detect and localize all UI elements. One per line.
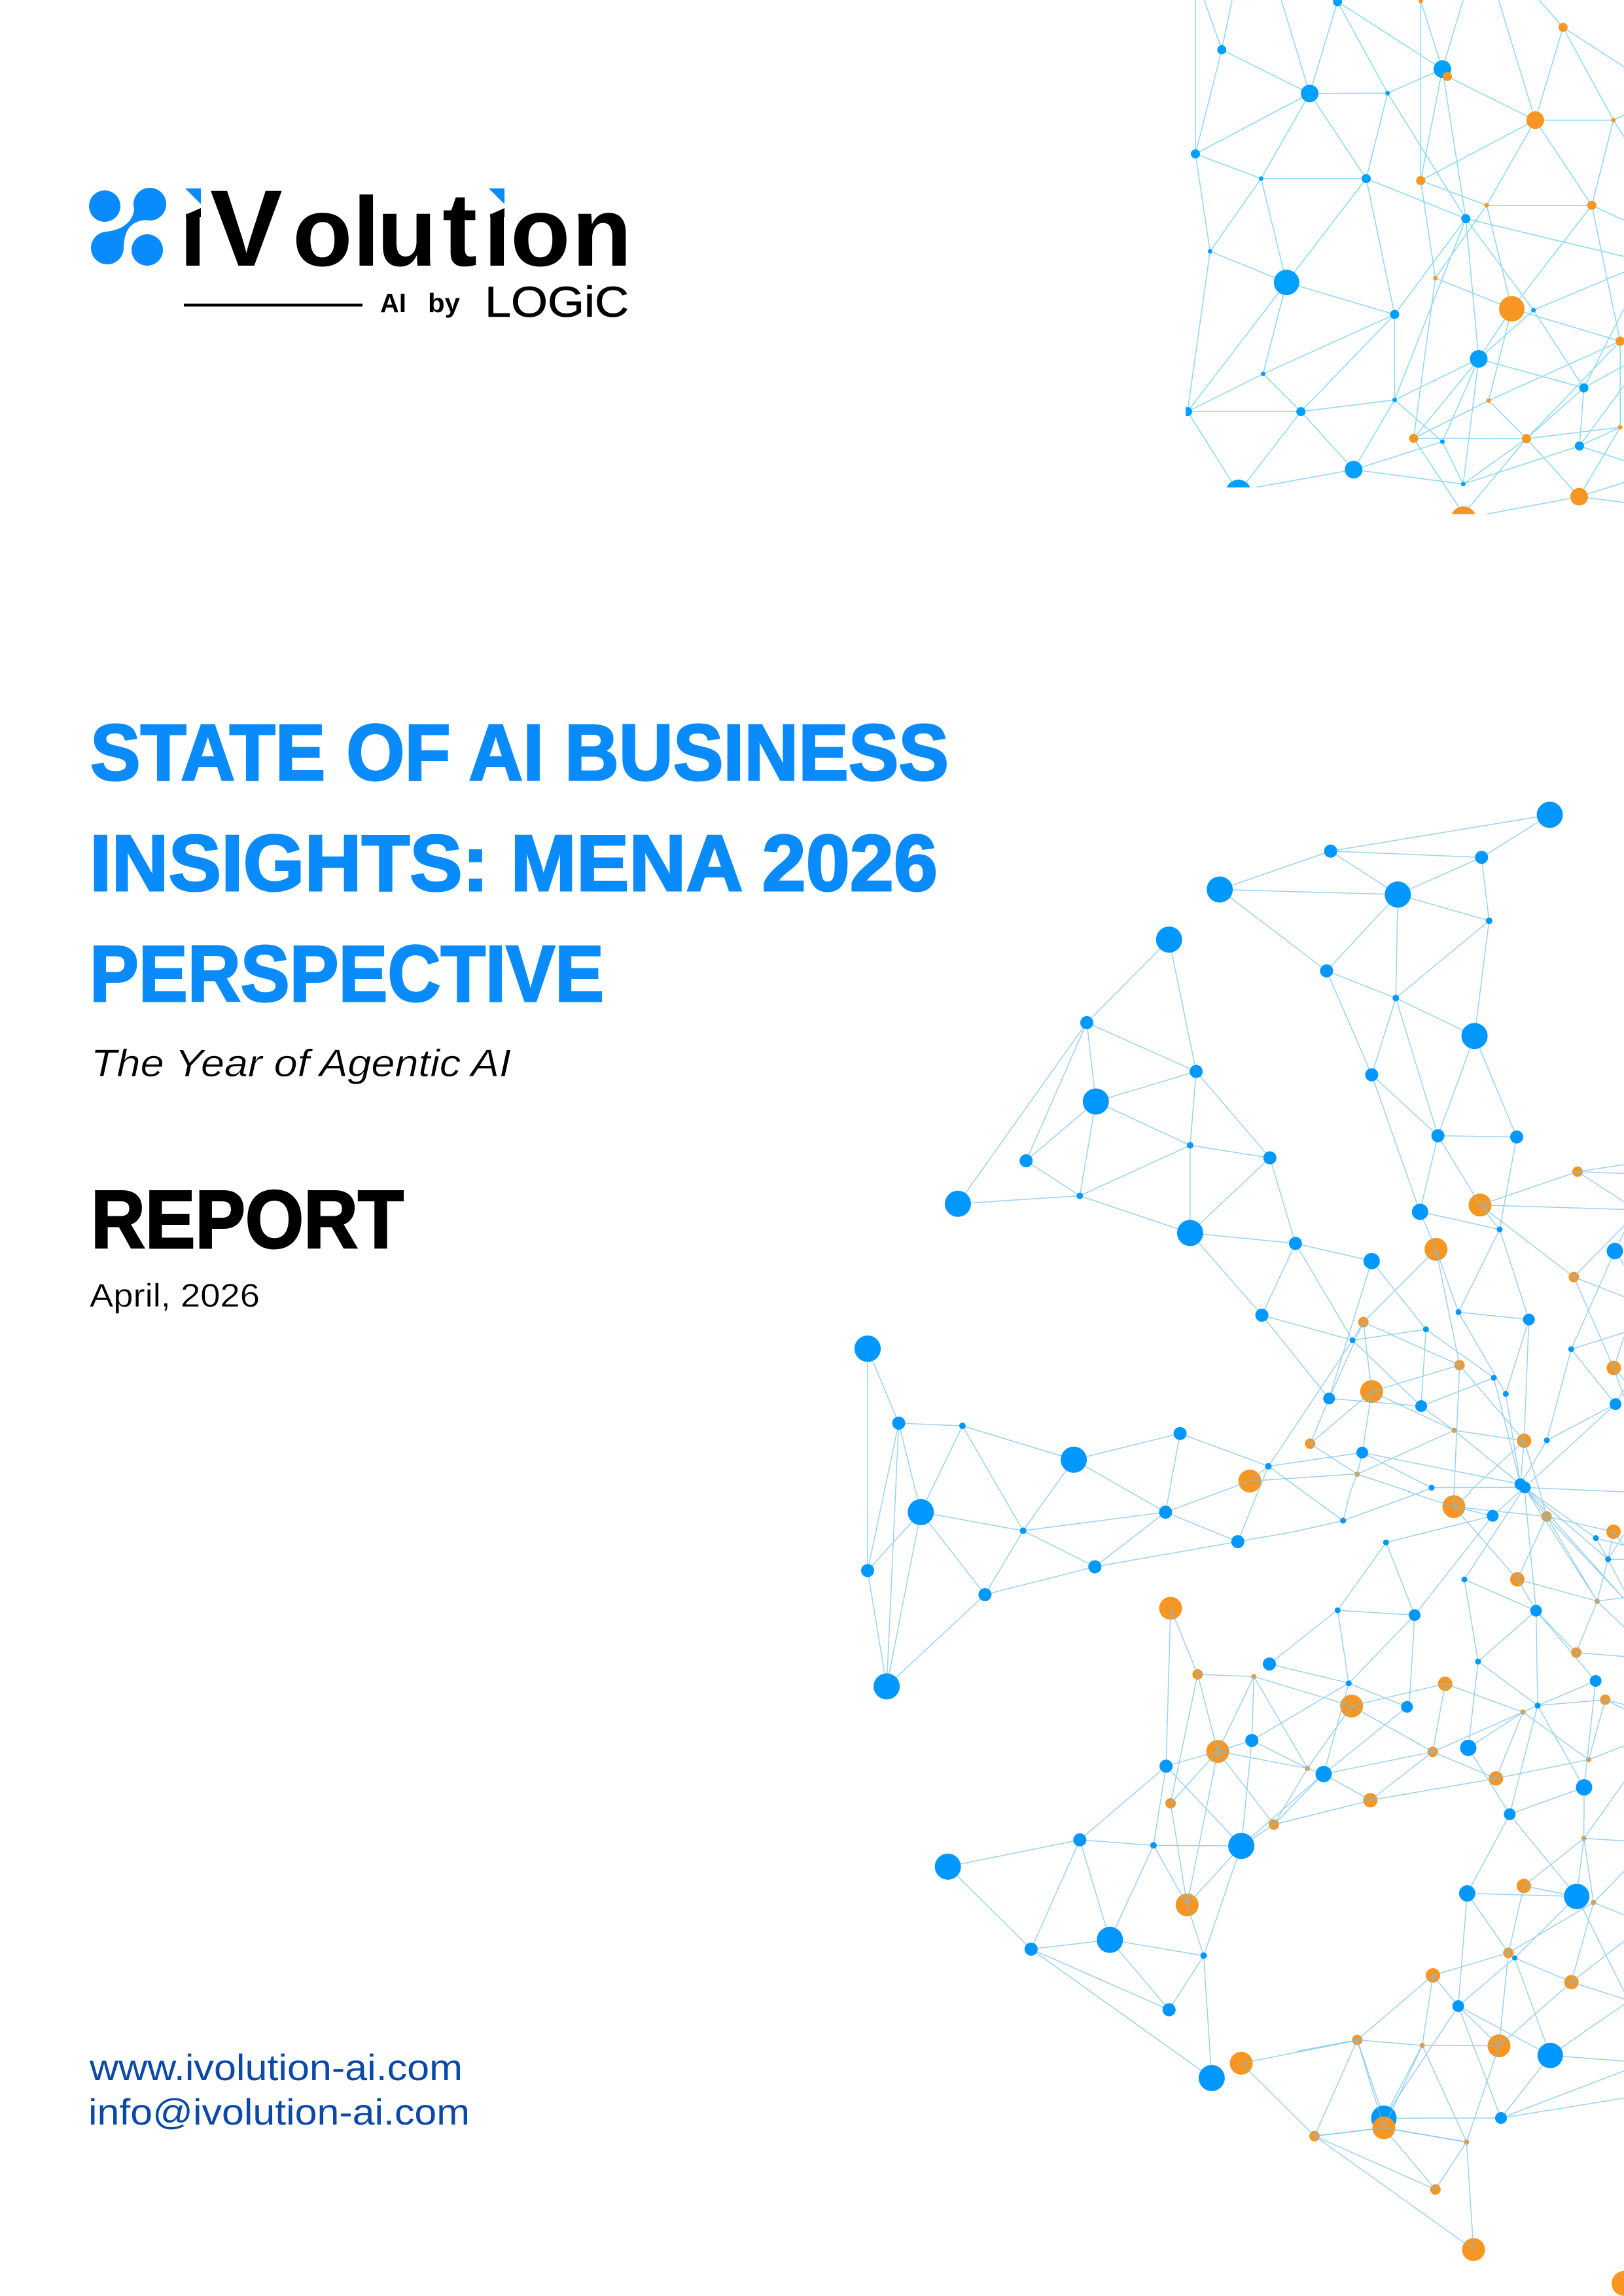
contact details bbox=[88, 2047, 470, 2132]
network illustration: top right bbox=[1188, 0, 1624, 519]
title: State of AI Business Insights: PERSPECTIVE bbox=[90, 929, 604, 1018]
top network: blue nodes bbox=[1188, 2, 1584, 493]
top network: connecting lines bbox=[1188, 0, 1624, 514]
contact details: info@ivolution-ai.com bbox=[88, 2091, 470, 2132]
top network: orange nodes bbox=[1414, 1, 1620, 519]
icon: iVolution blue four-lobe mark bbox=[89, 188, 166, 266]
title: State of AI Business Insights: INSIGHTS: MENA 2026 bbox=[90, 819, 938, 908]
network illustration: main right bbox=[868, 815, 1624, 2284]
subtitle: The Year of Agentic AI bbox=[91, 1042, 511, 1085]
logo: iVolution AI by LOGiC bbox=[89, 168, 632, 326]
date: April, 2026 bbox=[90, 1277, 260, 1314]
tagline: AI by LOGiC: AI bbox=[380, 288, 406, 318]
tagline: AI by LOGiC: LOGiC bbox=[485, 277, 629, 326]
heading: report: REPORT bbox=[91, 1174, 404, 1265]
title: State of AI Business Insights bbox=[90, 708, 949, 1018]
main network: connecting lines bbox=[868, 815, 1624, 2250]
wordmark: iVolution: iVolution bbox=[179, 168, 632, 289]
contact details: www.ivolution-ai.com bbox=[89, 2047, 463, 2088]
tagline: AI by LOGiC: by bbox=[428, 288, 460, 318]
main network: blue nodes bbox=[868, 815, 1615, 2142]
tagline: AI by LOGiC bbox=[184, 277, 629, 326]
main network: orange nodes bbox=[1171, 1172, 1624, 2284]
title: State of AI Business Insights: STATE OF AI BUSINESS bbox=[90, 708, 949, 797]
